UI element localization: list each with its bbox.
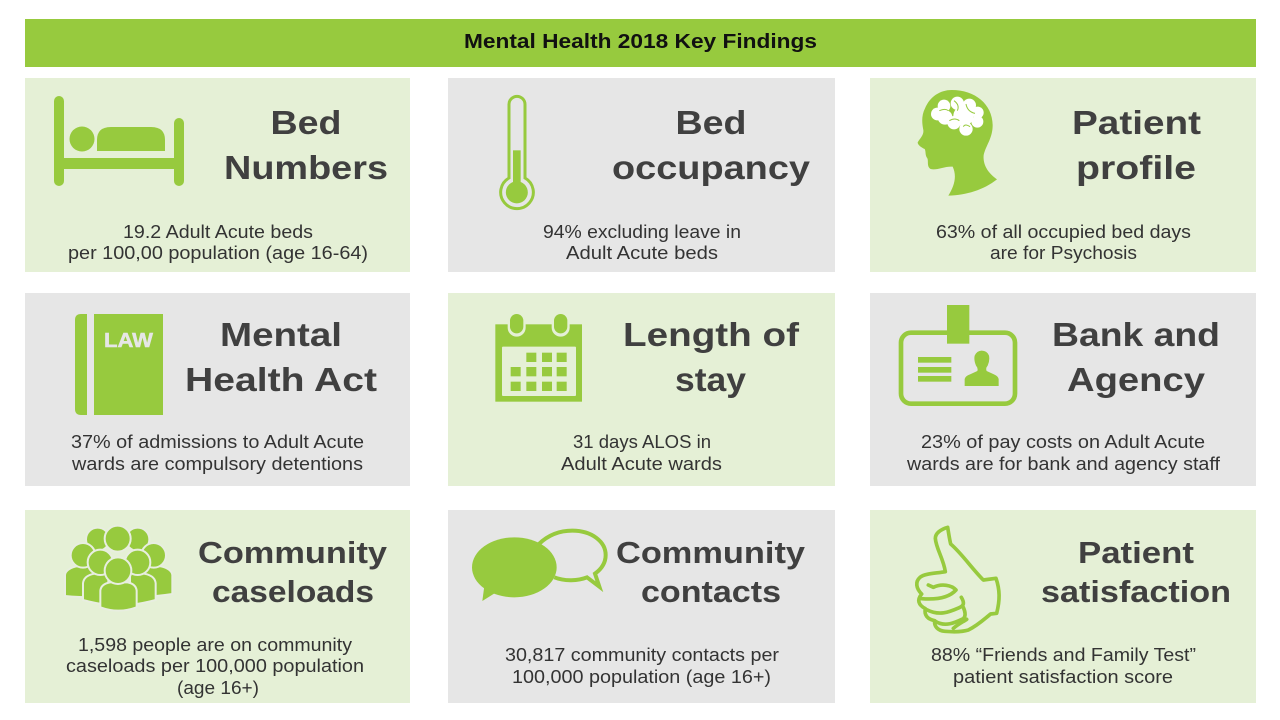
text: bank and agency finding [906, 432, 1221, 474]
text: patient satisfaction finding: patient satisfaction score [953, 667, 1173, 687]
icon: thumbs up [917, 527, 999, 632]
heading: length of stay: Length of [623, 316, 800, 353]
heading: bed numbers: Numbers [224, 149, 388, 186]
icon: head with brain [918, 90, 997, 196]
text: patient satisfaction finding [931, 645, 1196, 687]
text: community caseloads finding: 1,598 people are on community [78, 635, 352, 655]
panel: mental health act [25, 293, 410, 486]
text: mental health act finding: 37% of admissions to Adult Acute [71, 432, 364, 452]
text: community contacts finding: 100,000 population (age 16+) [512, 667, 771, 687]
text: patient profile finding [936, 222, 1191, 263]
panel: bank and agency [870, 293, 1256, 486]
text: bed occupancy finding: 94% excluding leave in [543, 222, 741, 242]
text: patient satisfaction finding: 88% “Friends and Family Test” [931, 645, 1196, 665]
heading: patient profile [1072, 104, 1201, 186]
text: community caseloads finding: (age 16+) [177, 678, 259, 698]
text: bank and agency finding: wards are for bank and agency staff [906, 454, 1221, 474]
panel: patient profile [870, 78, 1256, 272]
heading: mental health act: Mental [220, 316, 342, 353]
heading: patient profile: Patient [1072, 104, 1201, 141]
title banner: Mental Health 2018 Key Findings [464, 31, 817, 53]
icon: group of people [65, 526, 172, 611]
heading: length of stay [623, 316, 800, 398]
heading: community contacts: contacts [641, 574, 781, 609]
heading: bed numbers: Bed [270, 104, 342, 141]
heading: bed occupancy: occupancy [612, 149, 811, 186]
text: patient profile finding: are for Psychosis [990, 243, 1137, 263]
text: length of stay finding: Adult Acute wards [561, 454, 722, 474]
heading: bed occupancy: Bed [676, 104, 746, 141]
icon: thermometer [501, 96, 533, 209]
text: community caseloads finding [66, 635, 364, 698]
heading: mental health act: Health Act [185, 361, 377, 398]
text: bed occupancy finding: Adult Acute beds [566, 243, 718, 263]
heading: community contacts [616, 535, 806, 609]
text: community contacts finding: 30,817 community contacts per [505, 645, 779, 665]
heading: length of stay: stay [675, 361, 747, 398]
icon: bed [54, 96, 184, 186]
text: bed occupancy finding [543, 222, 741, 263]
panel: community contacts [448, 510, 835, 703]
text: community caseloads finding: caseloads per 100,000 population [66, 656, 364, 676]
heading: community contacts: Community [616, 535, 806, 570]
text: length of stay finding: 31 days ALOS in [573, 432, 711, 452]
panel: patient satisfaction [870, 510, 1256, 703]
heading: community caseloads: Community [198, 535, 388, 570]
title banner [25, 19, 1256, 67]
heading: patient satisfaction: satisfaction [1041, 574, 1231, 609]
panel: bed numbers [25, 78, 410, 272]
icon: id badge [901, 305, 1015, 404]
heading: bank and agency: Bank and [1052, 316, 1220, 353]
text: mental health act finding: wards are compulsory detentions [71, 454, 363, 474]
heading: patient profile: profile [1076, 149, 1196, 186]
panel: length of stay [448, 293, 835, 486]
text: mental health act finding [71, 432, 364, 474]
icon: calendar [495, 312, 582, 402]
heading: community caseloads [198, 535, 388, 609]
icon: speech bubbles [472, 531, 606, 601]
heading: community caseloads: caseloads [212, 574, 374, 609]
text: bank and agency finding: 23% of pay costs on Adult Acute [921, 432, 1205, 452]
heading: bank and agency [1052, 316, 1220, 398]
heading: bed occupancy [612, 104, 811, 186]
icon: law book [75, 314, 163, 415]
heading: bed numbers [224, 104, 388, 186]
text: bed numbers finding: per 100,00 population (age 16-64) [68, 243, 368, 263]
panel: bed occupancy [448, 78, 835, 272]
heading: patient satisfaction [1041, 535, 1231, 609]
icon: law book: LAW [104, 330, 153, 352]
panel: community caseloads [25, 510, 410, 703]
text: community contacts finding [505, 645, 779, 687]
heading: mental health act [185, 316, 377, 398]
text: length of stay finding [561, 432, 722, 474]
heading: patient satisfaction: Patient [1078, 535, 1194, 570]
text: bed numbers finding: 19.2 Adult Acute beds [123, 222, 313, 242]
text: bed numbers finding [68, 222, 368, 263]
heading: bank and agency: Agency [1067, 361, 1206, 398]
text: patient profile finding: 63% of all occupied bed days [936, 222, 1191, 242]
